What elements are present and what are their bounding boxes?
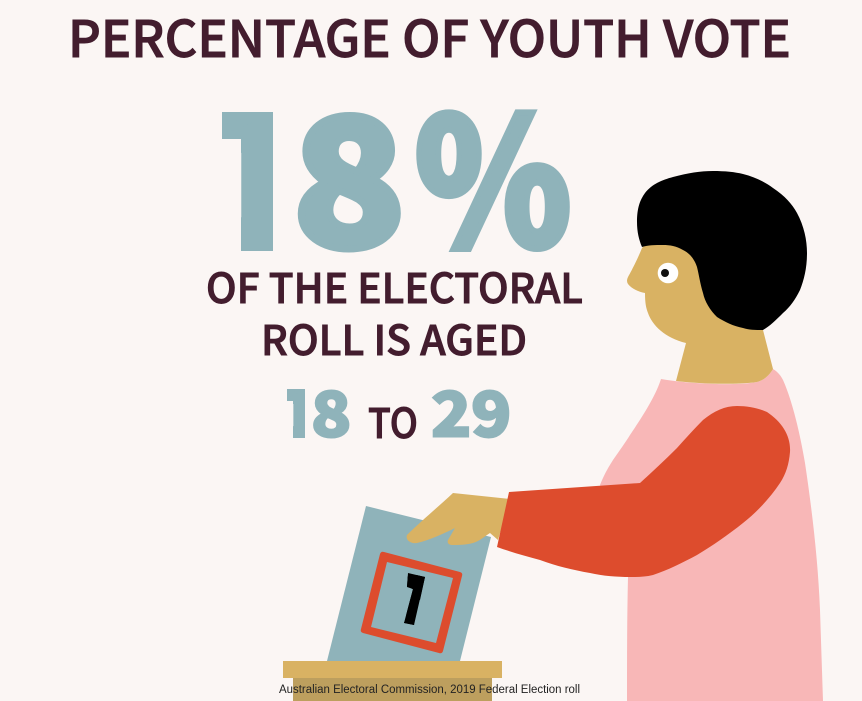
voter figure — [407, 171, 823, 701]
ballot square — [361, 552, 462, 653]
hair — [637, 171, 807, 330]
big number: 18%: 1 — [203, 39, 312, 299]
age range: 18 to 29: TO — [368, 390, 418, 450]
age range: 18 to 29: 8 — [311, 366, 351, 455]
age range: 18 to 29 — [287, 389, 510, 439]
subheading: ROLL IS AGED — [261, 307, 527, 367]
age range: 18 to 29: 1 — [280, 364, 318, 454]
big number: 18%: 8 — [292, 42, 406, 298]
ballot number: 1 — [385, 542, 446, 648]
ballot box — [283, 661, 502, 701]
sleeve — [497, 406, 790, 577]
big number: 18%: % — [414, 43, 572, 298]
big number: 18% — [222, 109, 570, 252]
subheading — [206, 255, 583, 367]
hand — [407, 493, 510, 545]
ballot paper — [327, 506, 491, 661]
neck and face — [627, 240, 773, 384]
eye — [658, 263, 678, 283]
age range: 18 to 29: 2 — [431, 366, 471, 455]
subheading: OF THE ELECTORAL — [206, 255, 583, 315]
title: PERCENTAGE OF YOUTH VOTE — [68, 0, 791, 72]
ballot number — [404, 573, 425, 625]
shirt — [600, 369, 823, 701]
source note: Australian Electoral Commission, 2019 Federal Election roll — [279, 684, 580, 696]
age range: 18 to 29: 9 — [471, 366, 511, 455]
